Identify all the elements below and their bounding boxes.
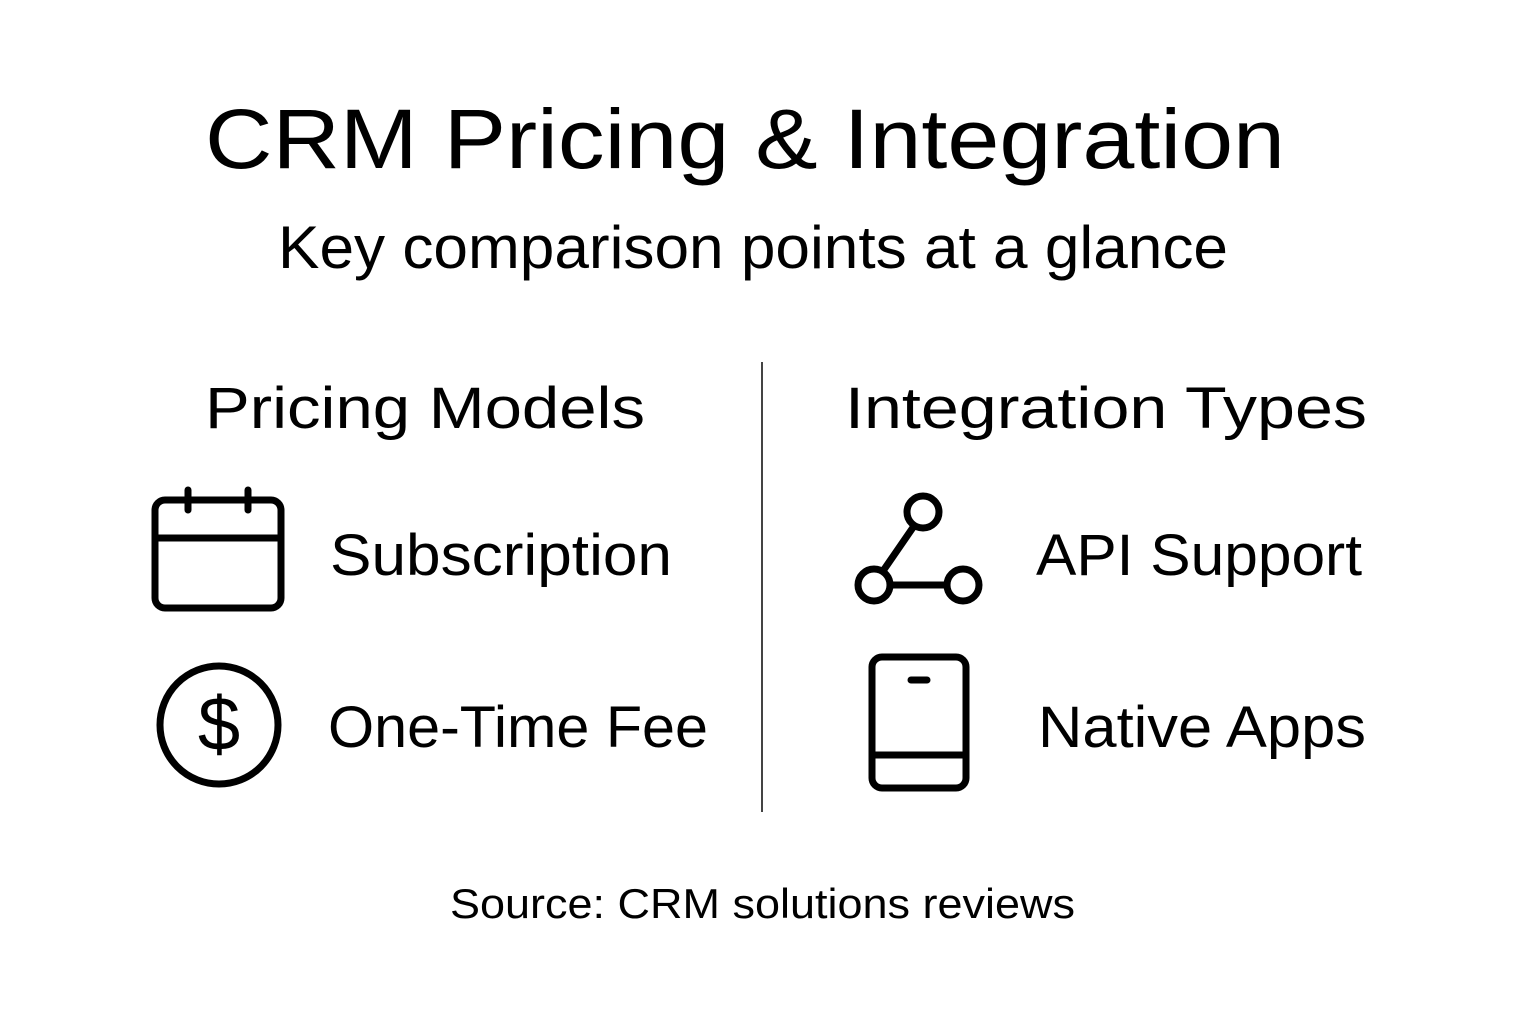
panel: pricing models xyxy=(155,376,708,784)
subtitle: Key comparison points at a glance xyxy=(278,214,1228,281)
icon: calendar xyxy=(155,490,281,608)
text: one-time fee: One-Time Fee xyxy=(328,695,708,760)
text: api support: API Support xyxy=(1036,523,1362,588)
title: CRM Pricing & Integration xyxy=(205,92,1285,186)
text: native apps: Native Apps xyxy=(1038,695,1366,760)
text: subscription: Subscription xyxy=(330,523,672,588)
icon: dollar xyxy=(160,666,278,784)
source: Source: CRM solutions reviews xyxy=(450,880,1075,927)
panel: integration types xyxy=(845,376,1367,788)
heading: integration types: Integration Types xyxy=(845,376,1367,441)
heading: pricing models: Pricing Models xyxy=(205,376,645,441)
icon: api nodes xyxy=(858,496,979,601)
icon: dollar: $ xyxy=(198,682,240,767)
icon: phone xyxy=(872,657,966,788)
